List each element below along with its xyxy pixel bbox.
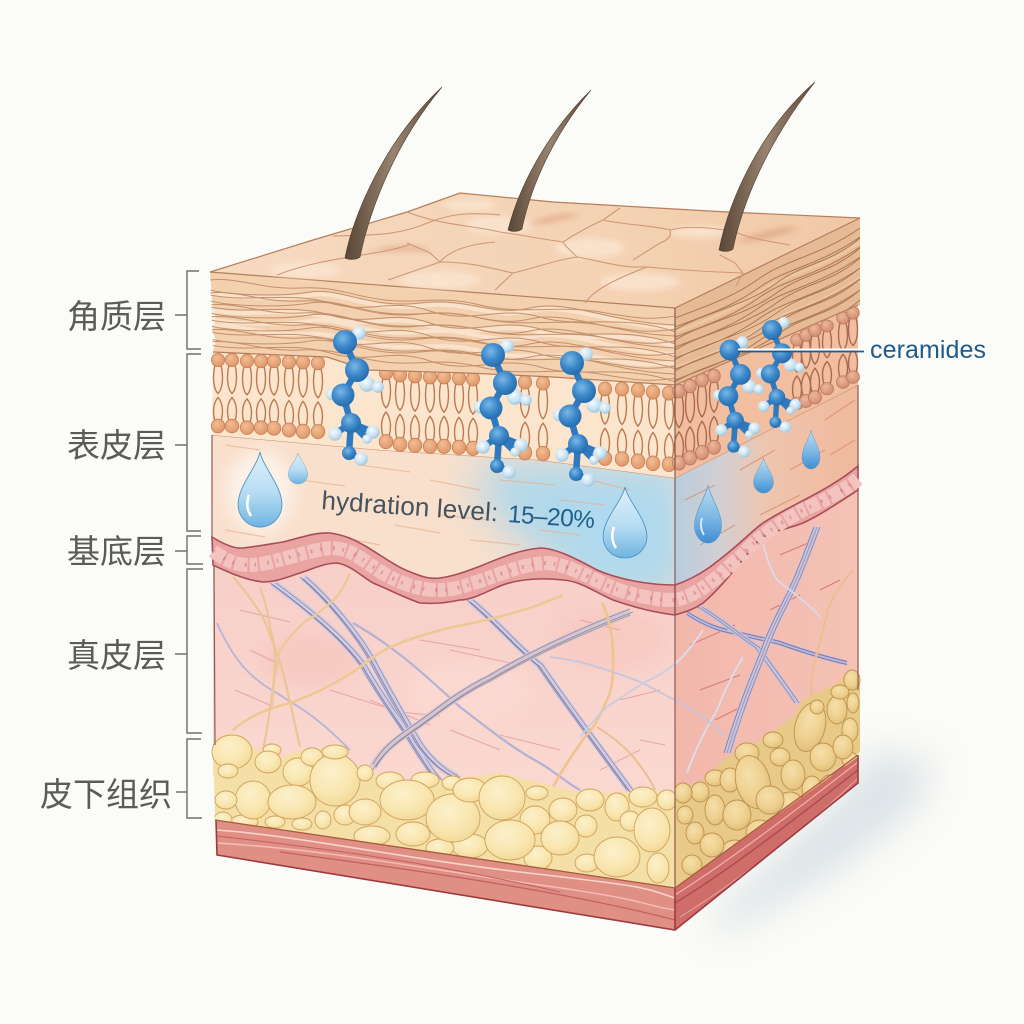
icon: water drop right face 3 [802, 430, 820, 469]
fat globules: right [674, 670, 860, 875]
ceramides leader line [738, 350, 864, 352]
icon: water drop center [603, 487, 647, 558]
icon: hair 2 [508, 90, 591, 231]
label: stratum corneum: 角质层 [67, 298, 166, 335]
label: basal layer: 基底层 [67, 533, 166, 570]
hairs [345, 82, 815, 259]
icon: water drop right face 1 [694, 485, 722, 543]
epidermis streaks [225, 445, 670, 545]
panel: subcutaneous fat [212, 668, 860, 888]
panel: epidermis [212, 385, 858, 600]
panel: stratum corneum [210, 218, 860, 392]
panel: muscle base layer [216, 755, 858, 930]
phospholipids mid front [379, 366, 676, 472]
right face streaks [685, 400, 855, 545]
bracket: basal layer [175, 536, 203, 564]
layer brackets [175, 271, 203, 818]
molecule 5 [756, 317, 804, 433]
label: subcutaneous tissue: 皮下组织 [40, 776, 172, 813]
bracket: epidermis [175, 354, 201, 531]
right face streaks [690, 540, 840, 720]
panel: lipid bilayer [211, 305, 859, 478]
basal cell blocks [213, 479, 858, 600]
fat globules: front [212, 735, 677, 883]
cast shadow [705, 752, 935, 930]
icon: hair 3 [719, 82, 815, 251]
surface shadows [368, 213, 800, 252]
molecule 1 [326, 326, 384, 466]
dermis colour washes [271, 622, 651, 678]
bracket: stratum corneum [175, 271, 201, 349]
surface highlights [270, 199, 730, 291]
block outline edges [212, 308, 858, 888]
surface cell lines [277, 208, 790, 303]
hydration level callout: hydration level: [321, 485, 499, 527]
ceramide molecules [326, 317, 804, 487]
hydration wash [480, 462, 690, 600]
icon: hair 1 [345, 87, 442, 259]
phospholipids right face [672, 307, 860, 470]
molecule 4 [713, 336, 764, 458]
front fibers [217, 573, 675, 792]
molecule 2 [474, 339, 532, 479]
icon: water drop small left [288, 453, 308, 484]
icon: water drop right face 2 [754, 458, 773, 493]
right face fibers [687, 613, 847, 663]
panel: dermis [213, 480, 858, 810]
hydration level callout: 15–20% [507, 501, 596, 534]
panel: skin top surface [210, 193, 860, 308]
hydration level callout [321, 485, 596, 534]
panel: basal layer [212, 466, 858, 615]
water droplets [238, 430, 820, 558]
bracket: dermis [175, 569, 203, 733]
icon: water drop large left [238, 452, 282, 527]
basal cell nuclei [213, 479, 858, 600]
drop glows [226, 450, 294, 534]
bracket: subcutaneous [176, 739, 202, 818]
molecule 3 [553, 347, 611, 487]
label: dermis: 真皮层 [67, 637, 166, 674]
label: epidermis: 表皮层 [67, 427, 166, 464]
corneum front strata [210, 280, 676, 382]
dermis red streaks [235, 610, 665, 770]
corneum right strata [675, 228, 860, 392]
phospholipids left front [211, 353, 325, 439]
ceramides label: ceramides [870, 336, 986, 364]
